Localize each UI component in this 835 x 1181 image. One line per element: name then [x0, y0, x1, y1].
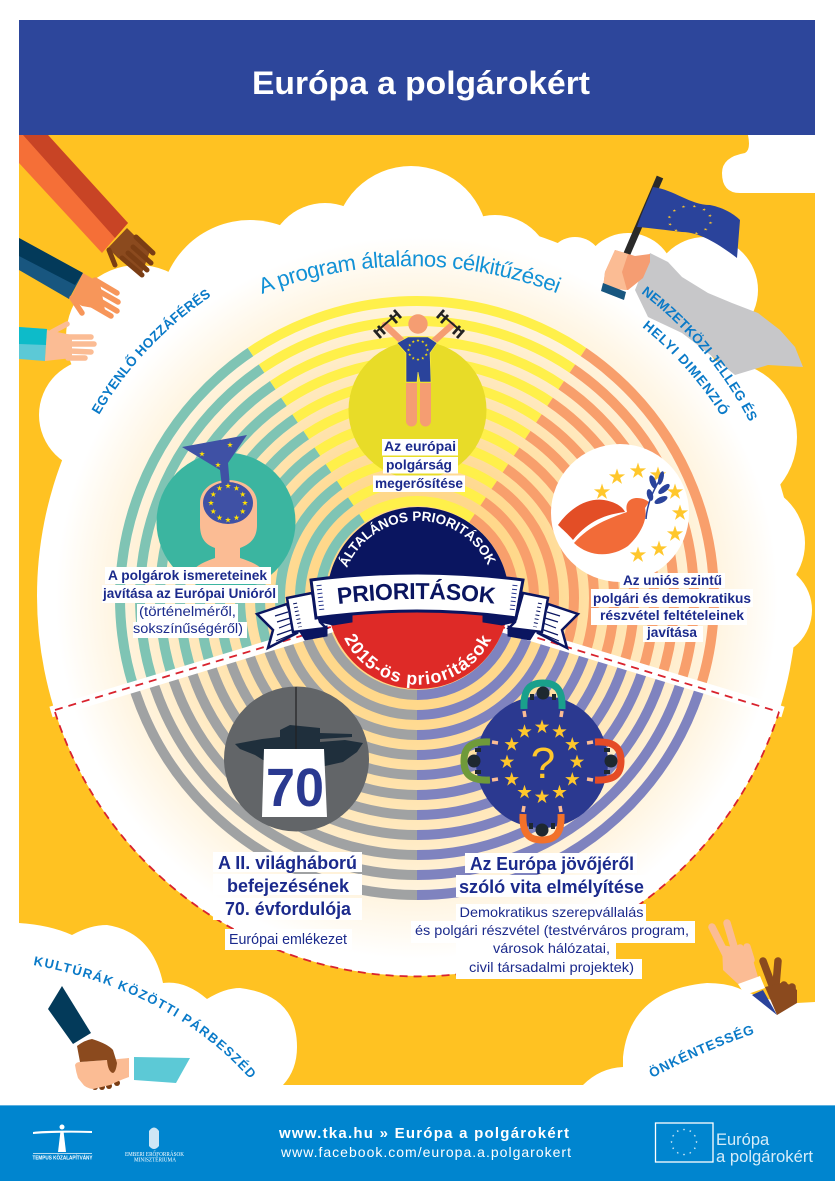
- concentric priority rings: [120, 301, 714, 895]
- text: debate on the future of Europe: és polgári részvétel (testvérváros program,: [415, 922, 689, 938]
- icon: tank with 70 sign: [224, 686, 369, 832]
- text: knowledge about the EU: [102, 567, 278, 638]
- label: international and local dimension: HELYI DIMENZIÓ: [642, 320, 730, 414]
- footer logo: ministry: [125, 1128, 184, 1164]
- text: knowledge about the EU: A polgárok ismereteinek: [108, 568, 267, 583]
- main cloud with radial glow: [37, 166, 812, 976]
- icon: victory hands: [712, 923, 797, 1015]
- text: strengthening citizenship: [373, 439, 465, 492]
- text: strengthening citizenship: megerősítése: [375, 476, 463, 491]
- footer logo: EU programme: a polgárokért: [716, 1148, 813, 1166]
- label: equal access: EGYENLŐ HOZZÁFÉRÉS: [92, 290, 210, 414]
- background yellow panel: [19, 135, 815, 1085]
- label: international and local dimension: NEMZETKÖZI JELLEG ÉS: [642, 286, 756, 421]
- footer logo: Tempus: TEMPUS KÖZALAPÍTVÁNY: [32, 1154, 93, 1162]
- text: civic and democratic participation: javítása: [646, 625, 697, 640]
- text: strengthening citizenship: polgárság: [386, 458, 452, 472]
- text: civic and democratic participation: polgári és demokratikus: [593, 591, 751, 606]
- text: civic and democratic participation: [591, 573, 753, 642]
- text: WWII anniversary: befejezésének: [227, 875, 350, 896]
- map of region: [635, 253, 803, 375]
- text: WWII anniversary: [213, 852, 362, 950]
- panel: strengthening European citizenship: [348, 310, 486, 492]
- cloud: bottom left: [19, 923, 297, 1085]
- icon: hand with cyan sleeve: [19, 324, 94, 361]
- navy upper half: [330, 507, 506, 576]
- text: debate on the future of Europe: szóló vita elmélyítése: [459, 876, 644, 897]
- panel: WWII anniversary: [213, 686, 369, 950]
- icon: round table with four people: ?: [531, 739, 555, 788]
- text: debate on the future of Europe: civil társadalmi projektek): [469, 959, 634, 975]
- icon: head with funnel: [156, 435, 296, 592]
- ribbon left fold: [257, 593, 352, 648]
- text: civic and democratic participation: Az uniós szintű: [623, 573, 722, 588]
- ribbon ornaments: [319, 585, 515, 612]
- icon: hand with navy sleeve: [19, 238, 118, 316]
- text: debate on the future of Europe: városok hálózatai,: [493, 940, 610, 956]
- text: debate on the future of Europe: [411, 853, 695, 979]
- ribbon label: PRIORITÁSOK: [338, 578, 496, 604]
- footer logo: ministry: EMBERI ERŐFORRÁSOK: [125, 1150, 184, 1158]
- footer links: www.tka.hu » Európa a polgárokért: [278, 1125, 569, 1142]
- label: intercultural dialogue: KULTÚRÁK KÖZÖTTI PÁRBESZÉD: [34, 956, 255, 1077]
- text: knowledge about the EU: (történelméről,: [139, 604, 236, 619]
- text: WWII anniversary: 70. évfordulója: [225, 898, 352, 919]
- footer logo: Tempus: [32, 1124, 93, 1162]
- 2015 priorities arc text: 2015-ös prioritások: [344, 634, 492, 688]
- footer logo: EU programme: [656, 1123, 813, 1166]
- title banner: Európa a polgárokért: [252, 65, 590, 101]
- footer logo: EU programme: Európa: [716, 1131, 770, 1149]
- footer bar: [0, 1105, 835, 1181]
- cloud: bottom right: [583, 983, 815, 1085]
- heading: program goals: A program általános célkitűzései: [262, 250, 562, 294]
- label: volunteering: ÖNKÉNTESSÉG: [650, 1026, 754, 1076]
- dashed boundary with white strip: [51, 601, 783, 976]
- general priorities arc text: ÁLTALÁNOS PRIORITÁSOK: [338, 512, 496, 568]
- central priorities badge: [254, 507, 580, 689]
- icon: athlete with dumbbells: [348, 310, 486, 479]
- cloud: top right: [722, 135, 815, 193]
- text: knowledge about the EU: sokszínűségéről): [133, 621, 243, 636]
- text: civic and democratic participation: részvétel feltételeinek: [600, 608, 745, 623]
- text: debate on the future of Europe: Az Európa jövőjéről: [470, 853, 634, 874]
- text: strengthening citizenship: Az európai: [384, 439, 456, 454]
- title banner: [19, 20, 815, 135]
- ribbon centre: [311, 573, 523, 618]
- text: WWII anniversary: A II. világháború: [218, 852, 357, 873]
- red lower half: [331, 612, 505, 689]
- footer links: [278, 1125, 571, 1160]
- panel: debate on the future of Europe: [411, 683, 695, 979]
- icon: handshake: [48, 986, 190, 1090]
- ribbon right fold: [483, 593, 578, 648]
- icon: tank with 70 sign: 70: [266, 758, 324, 818]
- text: knowledge about the EU: javítása az Európai Unióról: [102, 586, 276, 601]
- icon: hand with orange sleeve: [19, 135, 153, 275]
- icon: hand holding EU flag: [601, 177, 740, 300]
- text: debate on the future of Europe: Demokratikus szerepvállalás: [460, 904, 644, 920]
- icon: dove with stars: [551, 444, 689, 582]
- panel: knowledge about the EU: [102, 435, 296, 638]
- footer logo: ministry: MINISZTÉRIUMA: [134, 1156, 176, 1164]
- footer links: www.facebook.com/europa.a.polgarokert: [280, 1144, 571, 1160]
- panel: civic and democratic participation: [551, 444, 753, 642]
- icon: round table with four people: [464, 683, 621, 840]
- text: WWII anniversary: Európai emlékezet: [229, 932, 347, 948]
